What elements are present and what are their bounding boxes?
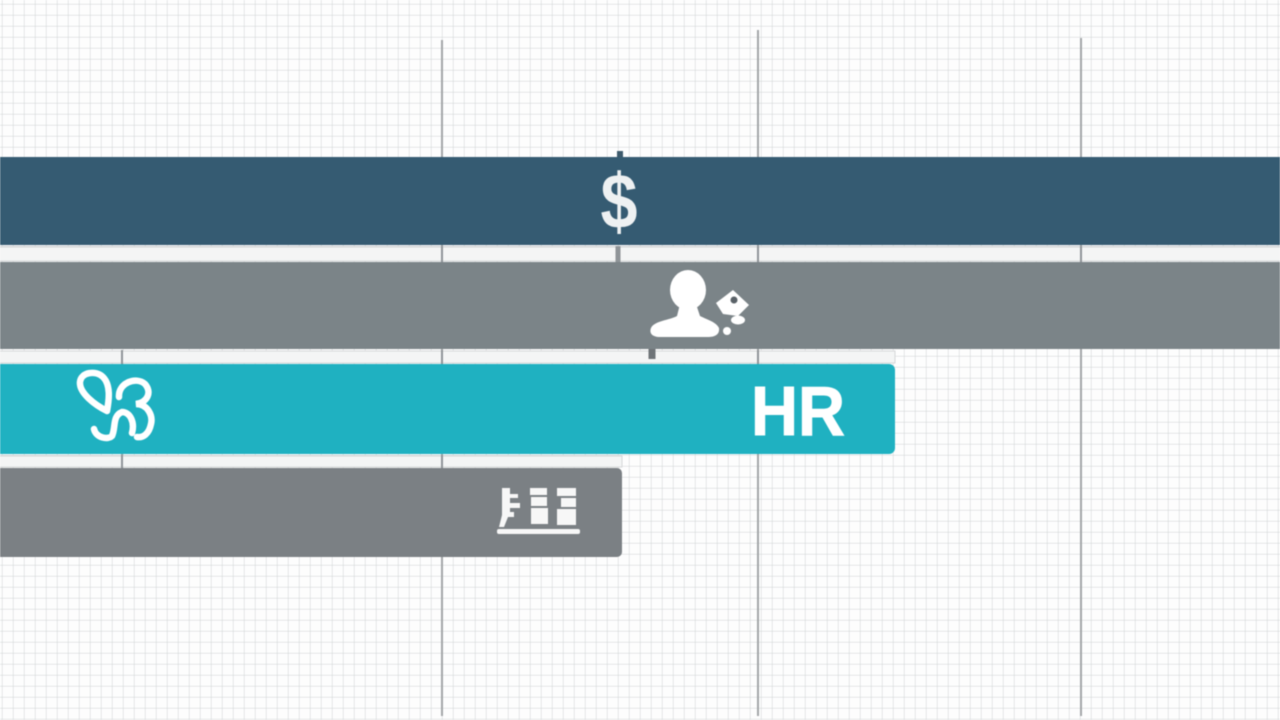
light bands between bars bbox=[0, 247, 1280, 467]
icon: building blocks bbox=[497, 488, 580, 534]
bar: HR bbox=[0, 364, 895, 454]
bar: finance bbox=[0, 157, 1280, 245]
icon: dollar sign: $ bbox=[600, 157, 638, 245]
label: HR: HR bbox=[751, 372, 845, 450]
bar: people bbox=[0, 262, 1280, 349]
icon: looped symbol bbox=[80, 373, 151, 438]
bar: operations bbox=[0, 468, 622, 557]
major vertical gridlines bbox=[122, 30, 1081, 716]
icon: person with tag bbox=[650, 270, 749, 337]
band gridline crossings bbox=[122, 151, 1081, 468]
